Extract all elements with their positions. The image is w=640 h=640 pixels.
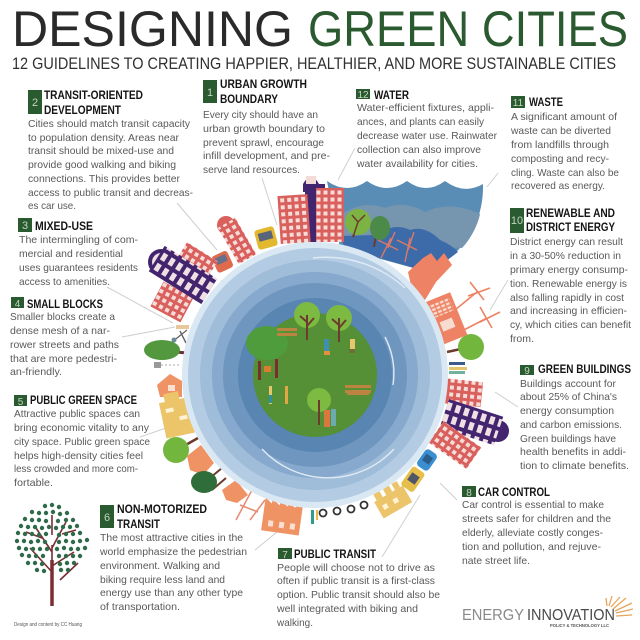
heading 6 <box>117 504 207 531</box>
number badge 8 <box>462 486 476 499</box>
heading 3: MIXED-USE <box>35 221 93 233</box>
icon: tree right <box>447 334 484 360</box>
icon: benches <box>277 328 371 395</box>
body 9: Buildings account for <box>520 379 617 390</box>
body 8: streets safer for children and the <box>462 514 611 525</box>
body 7: well integrated with biking and <box>276 604 418 615</box>
number badge 4: 4 <box>15 299 21 310</box>
icon: right side buildings <box>429 378 509 469</box>
logo: ENERGY <box>462 607 524 624</box>
heading 12: WATER <box>374 90 410 102</box>
number badge 7: 7 <box>282 550 288 561</box>
body 2: provide good walking and biking <box>28 160 176 171</box>
body 7: People will choose not to drive as <box>277 563 435 574</box>
number badge 12: 12 <box>357 90 369 101</box>
body 6: The most attractive cities in the <box>100 533 243 544</box>
icon: salmon building and turbines <box>424 282 500 345</box>
body 4 <box>10 312 119 378</box>
heading 2 <box>44 90 143 117</box>
body 8: nate street life. <box>462 556 530 567</box>
body 10: from. <box>510 334 534 345</box>
body 2: to population density. Areas near <box>28 133 180 144</box>
body 9: energy consumption <box>520 406 614 417</box>
body 3: uses guarantees residents <box>19 263 138 274</box>
body 4: dense mesh of a nar- <box>10 326 110 337</box>
body 10 <box>510 237 631 345</box>
body 8: tion and pollution, and rejuve- <box>462 542 601 553</box>
heading 4: SMALL BLOCKS <box>27 299 103 311</box>
body 12: decrease water use. Rainwater <box>357 131 498 142</box>
body 9: Green buildings have <box>520 434 616 445</box>
body 5: less crowded and more com- <box>14 464 138 475</box>
body 4: an-friendly. <box>10 367 62 378</box>
body 3: mercial and residential <box>19 249 123 260</box>
body 1 <box>203 110 330 176</box>
body 6 <box>99 533 247 613</box>
icon: red bus <box>211 250 234 274</box>
body 11: A significant amount of <box>511 112 617 123</box>
heading 2: DEVELOPMENT <box>44 105 121 117</box>
icon: wind turbines in water <box>378 232 417 262</box>
icon: taxi <box>400 466 426 493</box>
body 7 <box>276 563 440 629</box>
body 10: in a 30-50% reduction in <box>510 251 621 262</box>
heading 8: CAR CONTROL <box>478 487 550 499</box>
icon: sideways tree <box>144 340 186 360</box>
number badge 11: 11 <box>513 98 524 109</box>
body 2: transit should be mixed-use and <box>28 146 174 157</box>
logo: POLICY & TECHNOLOGY LLC <box>550 623 610 628</box>
panel: 12 water <box>356 89 498 170</box>
title <box>12 1 628 57</box>
body 2: connections. This provides better <box>28 174 181 185</box>
body 10: tion. Renewable energy is <box>510 279 627 290</box>
body 12: Water-efficient fixtures, appli- <box>357 103 494 114</box>
icon: cyclists <box>172 325 189 343</box>
icon: orange house lower left <box>187 445 214 475</box>
body 10: cy, which cities can benefit <box>510 320 631 331</box>
heading 1: URBAN GROWTH <box>220 79 307 91</box>
body 7: walking. <box>276 618 313 629</box>
body 11: waste can be diverted <box>510 126 611 137</box>
panel: 10 renewable and district energy <box>510 208 631 345</box>
number badge 8: 8 <box>466 488 472 499</box>
body 12: collection can also improve <box>357 145 481 156</box>
body 4: rower streets and paths <box>10 340 119 351</box>
icon: orange house and streets <box>222 480 265 520</box>
heading 11: WASTE <box>529 97 563 109</box>
body 6: environment. Walking and <box>100 561 220 572</box>
title: DESIGNING <box>12 1 293 57</box>
panel: 4 small blocks <box>10 297 119 378</box>
body 7: often if public transit is a first-class <box>277 576 435 587</box>
icon: sunburst <box>606 596 633 616</box>
body 11: composting and recy- <box>511 154 609 165</box>
icon: park trees <box>294 302 352 425</box>
heading 1 <box>220 79 307 106</box>
icon: salmon factory <box>408 253 452 300</box>
icon: purple and red left buildings <box>148 242 218 322</box>
icon: people right <box>449 362 467 374</box>
body 5: helps high-density cities feel <box>14 451 143 462</box>
body 8: Car control is essential to make <box>462 500 604 511</box>
panel: 1 urban growth boundary <box>203 79 330 176</box>
body 9: and carbon emissions. <box>520 420 622 431</box>
icon: yellow building lower right <box>371 480 412 519</box>
body 10: primary energy consump- <box>510 265 628 276</box>
heading 6: NON-MOTORIZED <box>117 504 207 516</box>
icon: city towers top <box>277 176 344 244</box>
body 12: ances, and plants can easily <box>357 117 485 128</box>
body 5: city space. Public green space <box>14 437 150 448</box>
body 12 <box>356 103 498 170</box>
body 6: energy use than any other type <box>100 588 243 599</box>
heading 6: TRANSIT <box>117 519 160 531</box>
number badge 2 <box>28 90 42 114</box>
logo: INNOVATION <box>527 607 615 624</box>
icon: bicycles and pedestrians <box>311 502 368 524</box>
body 6: world emphasize the pedestrian <box>99 547 247 558</box>
icon: orange factory <box>261 498 303 535</box>
body 1: infill development, and pre- <box>203 151 330 162</box>
heading 7: PUBLIC TRANSIT <box>294 549 376 561</box>
body 5 <box>14 409 150 489</box>
park lawn <box>246 313 377 437</box>
body 1: serve land resources. <box>203 165 300 176</box>
number badge 3: 3 <box>22 220 28 232</box>
panel: 5 public green space <box>14 395 150 489</box>
logo <box>462 596 633 628</box>
body 11: recovered as energy. <box>511 181 605 192</box>
body 2 <box>28 119 193 212</box>
body 8: elderly, alleviate costly conges- <box>462 528 603 539</box>
heading 10: DISTRICT ENERGY <box>526 222 615 234</box>
number badge 1: 1 <box>207 87 213 99</box>
body 4: that are more pedestri- <box>10 354 117 365</box>
body 2: es car use. <box>28 201 76 212</box>
heading 2: TRANSIT-ORIENTED <box>44 90 143 102</box>
body 9: tion to climate benefits. <box>520 461 629 472</box>
circular plaza <box>182 242 448 508</box>
heading 10: RENEWABLE AND <box>526 208 615 220</box>
number badge 7 <box>278 548 292 561</box>
number badge 5: 5 <box>18 397 24 408</box>
icon: yellow building <box>157 389 195 438</box>
icon: swing <box>258 359 278 380</box>
icon: orange house <box>157 374 182 397</box>
body 2: Cities should match transit capacity <box>28 119 191 130</box>
panel: 6 non-motorized transit <box>99 504 247 613</box>
body 9: health benefits in addi- <box>520 447 626 458</box>
leader lines <box>107 148 518 557</box>
icon: round tree lower left <box>163 437 198 463</box>
body 6: biking require less land and <box>100 575 225 586</box>
body 10: and increasing in efficien- <box>510 306 627 317</box>
body 9: about 25% of China's <box>520 392 617 403</box>
body 1: prevent sprawl, encourage <box>203 138 324 149</box>
body 3: access to amenities. <box>19 277 110 288</box>
body 2: access to public transit and decreas- <box>28 188 193 199</box>
number badge 10: 10 <box>511 215 523 227</box>
body 10: District energy can result <box>510 237 623 248</box>
body 5: fortable. <box>14 478 53 489</box>
icon: park people <box>269 339 355 427</box>
heading 10 <box>526 208 615 234</box>
panel: 8 car control <box>462 486 611 567</box>
body 4: Smaller blocks create a <box>10 312 115 323</box>
panel: 3 mixed-use <box>18 218 138 288</box>
body 5: bring economic vitality to any <box>14 423 150 434</box>
credit: Design and content by CC Huang <box>14 622 82 628</box>
body 6: of transportation. <box>100 602 180 613</box>
body 1: Every city should have an <box>203 110 318 121</box>
icon: red building top left <box>217 216 256 264</box>
body 11 <box>510 112 619 192</box>
panel: 11 waste <box>510 96 619 192</box>
icon: decorative tree <box>17 505 87 606</box>
number badge 2: 2 <box>32 97 38 109</box>
body 11: cling. Waste can also be <box>511 168 619 179</box>
number badge 6: 6 <box>104 512 110 524</box>
icon: dark tree <box>191 468 226 493</box>
icon: street lamp <box>154 362 181 368</box>
panel: 7 public transit <box>276 548 440 629</box>
icon: blue car <box>416 448 438 472</box>
panel: 2 transit-oriented development <box>28 90 193 212</box>
number badge 9: 9 <box>524 366 530 377</box>
icon: water trees <box>345 209 390 247</box>
icon: school bus <box>254 226 278 250</box>
panel: 9 green buildings <box>520 364 631 472</box>
body 3: The intermingling of com- <box>19 235 138 246</box>
body 10: also falling rapidly in cost <box>510 293 624 304</box>
icon: distance arrow <box>193 281 229 329</box>
body 7: option. Public transit should also be <box>277 590 440 601</box>
water scene <box>327 181 483 272</box>
body 3 <box>19 235 138 288</box>
heading 1: BOUNDARY <box>220 94 278 106</box>
body 5: Attractive public spaces can <box>14 409 140 420</box>
body 11: from landfills through <box>511 140 609 151</box>
number badge 6 <box>100 505 114 528</box>
heading 5: PUBLIC GREEN SPACE <box>30 395 137 407</box>
body 9 <box>520 379 629 472</box>
body 8 <box>462 500 611 567</box>
body 1: urban growth boundary to <box>203 124 325 135</box>
body 12: water availability for cities. <box>356 159 478 170</box>
